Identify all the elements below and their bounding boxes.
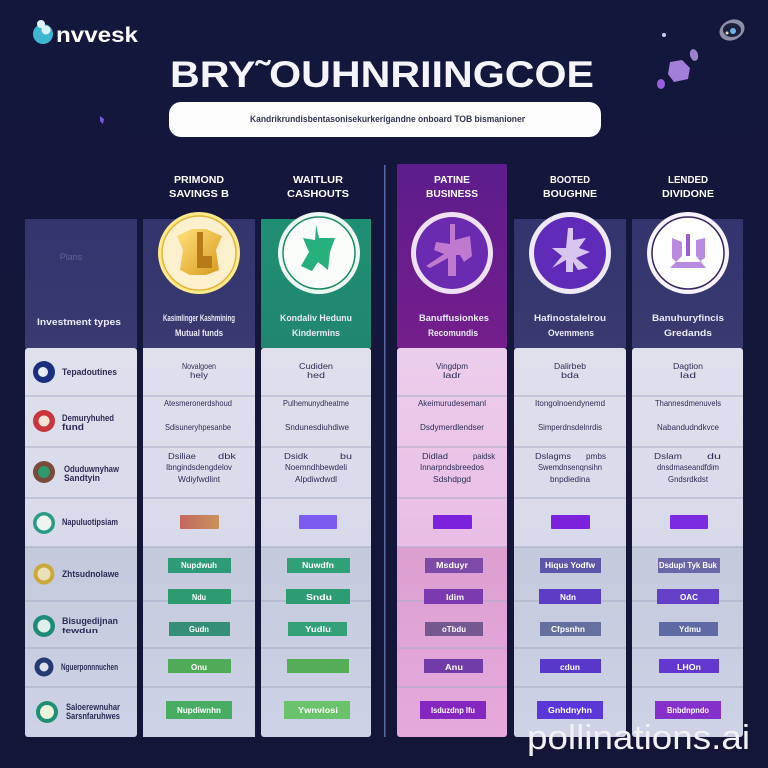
- column titles: [169, 175, 714, 200]
- table text: rows 1 to 3: Itongolnoendynemd: [535, 398, 605, 408]
- row icons and labels: Zhtsudnolawe: [62, 569, 119, 579]
- subtitle bar: [169, 102, 601, 137]
- row icons and labels: Napuluotipsiam: [62, 517, 118, 527]
- purple pills: lilac column: Bnbdnpndo: [667, 705, 709, 715]
- purple pills: violet column: [537, 558, 603, 719]
- watermark: pollinations.ai: [527, 719, 750, 757]
- panel: magenta column: [397, 164, 507, 737]
- panel: lilac column: [632, 219, 743, 737]
- table text: rows 1 to 3: Dsiliae: [168, 451, 196, 461]
- row icons and labels: fund: [62, 422, 84, 432]
- table text: rows 1 to 3: dnsdmaseandfdim: [657, 462, 719, 472]
- table text: rows 1 to 3: paidsk: [473, 451, 496, 461]
- green pills: green column: Nuwdfn: [302, 560, 334, 570]
- logo: nvvesk: [56, 24, 138, 47]
- header descriptions: Kasimlinger Kashmining: [163, 313, 235, 324]
- panel: gold column: [143, 219, 255, 737]
- table text: rows 1 to 3: Sndunesdiuhdiwe: [285, 422, 349, 432]
- table text: rows 1 to 3: Sdisuneryhpesanbe: [165, 422, 231, 432]
- green pills: gold column: Nupdwuh: [181, 560, 217, 570]
- table text: rows 1 to 3: Sdshdpgd: [433, 474, 471, 484]
- purple pills: violet column: cdun: [560, 662, 580, 672]
- table text: rows 1 to 3: lad: [680, 370, 696, 380]
- row lines: [25, 396, 743, 687]
- decorative sparkle: [100, 116, 104, 124]
- logo: [33, 20, 138, 47]
- icon: green medallion: [278, 212, 360, 294]
- header descriptions: Mutual funds: [175, 328, 223, 339]
- green pills: gold column: Nupdiwnhn: [177, 705, 221, 715]
- row icons and labels: Oduduwnyhaw: [64, 464, 120, 474]
- column titles: PRIMOND: [174, 175, 224, 186]
- purple pills: violet column: Gnhdnyhn: [548, 705, 592, 715]
- header descriptions: Banuffusionkes: [419, 313, 489, 324]
- column titles: BUSINESS: [426, 189, 478, 200]
- icon: violet medallion: [529, 212, 611, 294]
- column label: Investment types: [37, 317, 121, 328]
- header descriptions: [163, 313, 724, 339]
- table text: rows 1 to 3: hed: [307, 370, 325, 380]
- table text: rows 1 to 3: Thannesdmenuvels: [655, 398, 721, 408]
- purple pills: magenta column: Anu: [445, 662, 463, 672]
- table text: rows 1 to 3: Novalgoen: [182, 361, 216, 371]
- table text: rows 1 to 3: Pulhemunydheatme: [283, 398, 349, 408]
- panel: label column: [25, 219, 137, 737]
- green pills: gold column: Onu: [191, 662, 207, 672]
- green pills: gold column: [166, 558, 232, 719]
- purple pills: lilac column: LHOn: [677, 662, 701, 672]
- column titles: DIVIDONE: [662, 189, 714, 200]
- table text: rows 1 to 3: bda: [561, 370, 579, 380]
- table text: rows 1 to 3: bu: [340, 451, 352, 461]
- column titles: BOOTED: [550, 175, 590, 186]
- row icons and labels: fewdun: [62, 628, 98, 635]
- column titles: WAITLUR: [293, 175, 344, 186]
- table text: rows 1 to 3: Vingdpm: [436, 361, 468, 371]
- row icons and labels: Demuryhuhed: [62, 413, 114, 423]
- purple pills: magenta column: Idim: [446, 592, 464, 602]
- row icons and labels: Sandtyin: [64, 473, 100, 483]
- table text: rows 1 to 3: Dslagms: [535, 451, 571, 461]
- purple pills: magenta column: [420, 558, 486, 719]
- purple pills: magenta column: Isduzdnp Ifu: [431, 705, 475, 715]
- table text: rows 1 to 3: Dsidk: [284, 451, 309, 461]
- decorative gem icon: [662, 15, 748, 45]
- column titles: BOUGHNE: [543, 189, 597, 200]
- purple pills: magenta column: Msduyr: [436, 560, 469, 570]
- table text: rows 1 to 3: Dalirbeb: [554, 361, 586, 371]
- purple pills: lilac column: [655, 558, 721, 719]
- subtitle bar: Kandrikrundisbentasonisekurkerigandne onboard TOB bismanioner: [250, 114, 525, 124]
- header descriptions: Gredands: [664, 328, 712, 339]
- icon: gold medallion: [158, 212, 240, 294]
- table text: rows 1 to 3: Dslam: [654, 451, 682, 461]
- green pills: gold column: Ndu: [192, 592, 206, 602]
- green pills: green column: Ywnvlosi: [298, 705, 338, 715]
- green pills: green column: Sndu: [306, 592, 332, 602]
- table text: rows 1 to 3: Simperdnsdelnrdis: [538, 422, 602, 432]
- table text: rows 1 to 3: Swemdnsenqnsihn: [538, 462, 602, 472]
- green pills: green column: [284, 558, 350, 719]
- row icons and labels: Nguerponnnuchen: [61, 662, 118, 672]
- table text: rows 1 to 3: dbk: [218, 451, 237, 461]
- panel: violet column: [514, 219, 626, 737]
- table text: rows 1 to 3: Ibngindsdengdelov: [166, 462, 233, 472]
- table text: rows 1 to 3: hely: [190, 370, 209, 380]
- colour swatches row: [180, 515, 708, 529]
- purple pills: violet column: Cfpsnhn: [551, 624, 585, 634]
- table text: rows 1 to 3: Dsdymerdlendser: [420, 422, 484, 432]
- column titles: CASHOUTS: [287, 189, 349, 200]
- table text: rows 1 to 3: Gndsrdkdst: [668, 474, 709, 484]
- header descriptions: Hafinostalelrou: [534, 313, 606, 324]
- table text: rows 1 to 3: Alpdiwdwdl: [295, 474, 337, 484]
- table text: rows 1 to 3: Atesmeronerdshoud: [164, 398, 232, 408]
- column titles: LENDED: [668, 175, 708, 186]
- header descriptions: Kindermins: [292, 328, 340, 339]
- table text: rows 1 to 3: pmbs: [586, 451, 606, 461]
- row icons and labels: [33, 361, 120, 723]
- decorative purple splash: [657, 48, 699, 89]
- faint label: Plans: [60, 252, 83, 262]
- table text: rows 1 to 3: Wdiyfwdlint: [178, 474, 221, 484]
- row icons and labels: Tepadoutines: [62, 367, 117, 377]
- purple pills: lilac column: Dsdupl Tyk Buk: [659, 560, 717, 570]
- purple pills: lilac column: OAC: [680, 592, 698, 602]
- purple pills: lilac column: Ydmu: [679, 624, 701, 634]
- table text: rows 1 to 3: Akeimurudesemanl: [418, 398, 486, 408]
- divider: [384, 165, 386, 737]
- purple pills: violet column: Ndn: [560, 592, 576, 602]
- header descriptions: Kondaliv Hedunu: [280, 313, 352, 324]
- row icons and labels: Saloerewnuhar: [66, 702, 120, 712]
- header descriptions: Banuhuryfincis: [652, 313, 724, 324]
- header descriptions: Ovemmens: [548, 328, 594, 339]
- column titles: SAVINGS B: [169, 189, 229, 200]
- table text: rows 1 to 3: Nabandudndkvce: [657, 422, 719, 432]
- table text: rows 1 to 3: Cudiden: [299, 361, 333, 371]
- purple pills: magenta column: oTbdu: [442, 624, 466, 634]
- table text: rows 1 to 3: Noemndhbewdeli: [285, 462, 347, 472]
- row icons and labels: Sarsnfaruhwes: [66, 711, 120, 721]
- header descriptions: Recomundis: [428, 328, 478, 339]
- icon: white medallion: [647, 212, 729, 294]
- table text: rows 1 to 3: [164, 361, 721, 484]
- table text: rows 1 to 3: Innarpndsbreedos: [420, 462, 484, 472]
- column titles: PATINE: [434, 175, 470, 186]
- row icons and labels: Bisugedijnan: [62, 616, 118, 626]
- table text: rows 1 to 3: Didlad: [422, 451, 448, 461]
- green pills: gold column: Gudn: [189, 624, 209, 634]
- purple pills: violet column: Hiqus Yodfw: [545, 560, 595, 570]
- table text: rows 1 to 3: du: [707, 451, 721, 461]
- green pills: green column: Yudlu: [305, 624, 331, 634]
- table text: rows 1 to 3: ladr: [443, 370, 461, 380]
- table text: rows 1 to 3: Dagtion: [673, 361, 703, 371]
- table text: rows 1 to 3: bnpdiedina: [550, 474, 590, 484]
- icon: magenta medallion: [411, 212, 493, 294]
- panel: green column: [261, 219, 371, 737]
- title: BRY˜OUHNRIINGCOE: [170, 54, 594, 95]
